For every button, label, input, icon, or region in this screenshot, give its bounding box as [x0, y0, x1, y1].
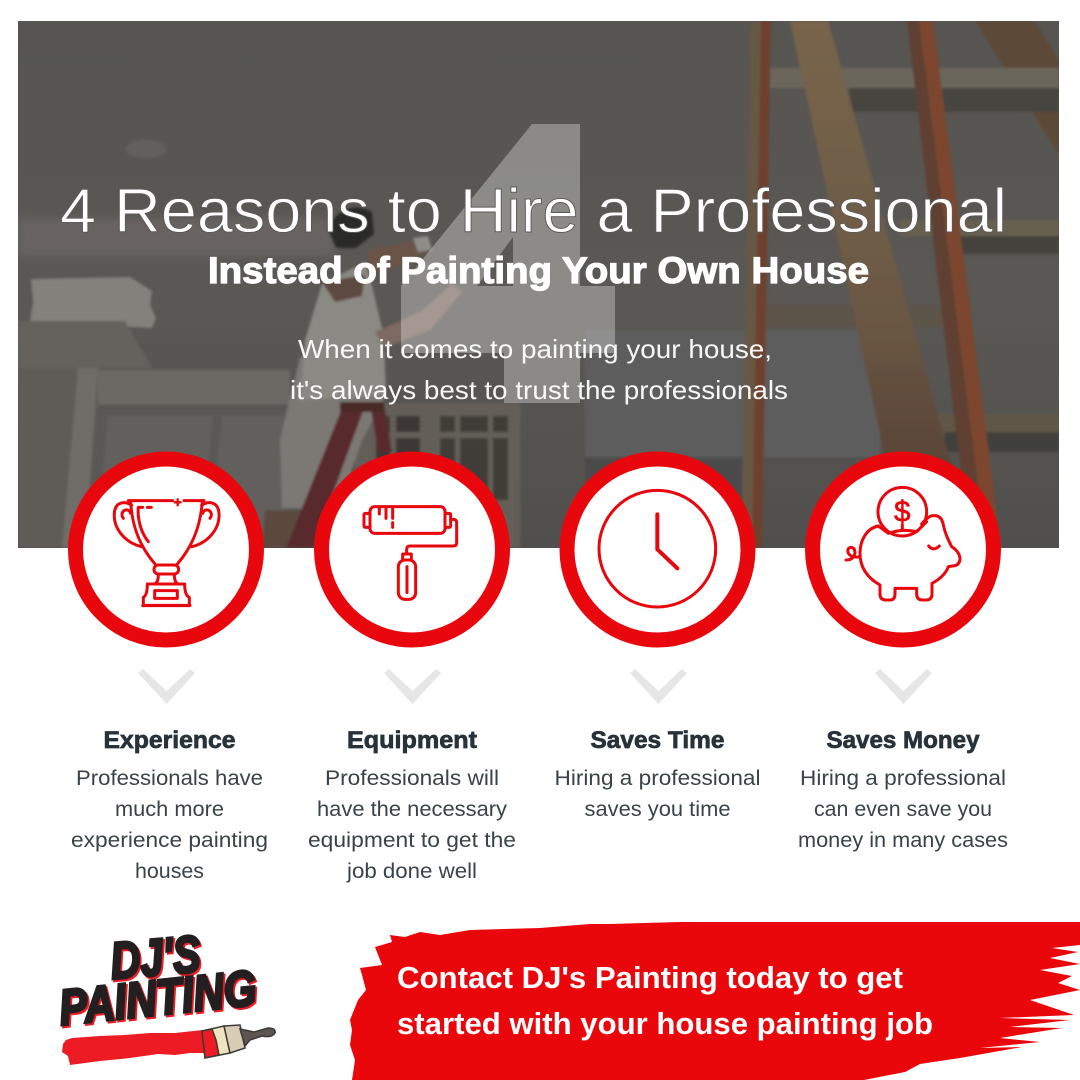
- chevron arrow 4: [875, 669, 932, 704]
- intro text: it's always best to trust the professionals: [290, 375, 788, 405]
- feature: equipment: Equipment: [347, 727, 477, 754]
- circle: experience: [76, 459, 256, 640]
- painter legs and shorts: [280, 352, 386, 510]
- orange ladder rail left: [741, 21, 761, 526]
- icon: piggy bank: [846, 487, 960, 600]
- title: 4 Reasons to Hire a Professional: [60, 177, 1007, 246]
- feature: saves money: can even save you: [814, 798, 992, 821]
- wood ladder far rail: [975, 21, 1059, 155]
- circle: equipment: [322, 459, 502, 640]
- feature: equipment: job done well: [346, 860, 477, 883]
- feature: saves money: [798, 727, 1008, 852]
- feature: saves money: money in many cases: [798, 829, 1008, 852]
- cabinet left column and doors: [18, 368, 98, 548]
- painter shirt: [300, 262, 386, 400]
- large wood ladder rail: [790, 21, 952, 464]
- logo brush: [202, 1025, 275, 1058]
- feature: saves time: Hiring a professional: [554, 767, 760, 790]
- crown molding: [18, 218, 335, 256]
- red step ladder: [286, 403, 366, 548]
- feature: experience: experience painting: [71, 829, 268, 852]
- logo: DJ's Painting: [56, 925, 275, 1065]
- feature: experience: much more: [115, 798, 224, 821]
- cabinet top cornice: [18, 321, 152, 368]
- feature: experience: Professionals have: [76, 767, 263, 790]
- feature: saves time: saves you time: [584, 798, 730, 821]
- feature: equipment: have the necessary: [317, 798, 508, 821]
- logo text PAINTING: PAINTING: [56, 960, 259, 1036]
- ladder rungs: [770, 68, 1059, 88]
- painter lower arm: [375, 284, 462, 348]
- feature: saves time: [554, 727, 760, 821]
- feature: saves money: Saves Money: [826, 727, 980, 754]
- logo text DJ'S: DJ'S: [108, 925, 203, 991]
- recessed ceiling light: [127, 140, 165, 158]
- logo text DJ'S: DJ'S: [110, 927, 205, 993]
- painter neck: [322, 275, 365, 302]
- feature: equipment: Professionals will: [325, 767, 499, 790]
- large translucent number 4: [401, 124, 615, 403]
- stacked boards on cabinet: [30, 277, 156, 328]
- feature: equipment: [308, 727, 516, 883]
- banner: red brush stroke: [350, 922, 1080, 1080]
- logo paint stroke: [62, 1030, 207, 1065]
- lower right wall panel: [585, 330, 880, 457]
- feature: saves money: Hiring a professional: [800, 767, 1006, 790]
- roller handle in hand: [413, 236, 432, 252]
- subtitle: Instead of Painting Your Own House: [208, 250, 869, 291]
- icon: trophy: [114, 499, 219, 606]
- logo text PAINTING: PAINTING: [58, 961, 261, 1038]
- orange ladder rail right: [906, 21, 980, 487]
- chevron arrow 1: [138, 669, 195, 704]
- feature: saves time: Saves Time: [590, 727, 724, 754]
- circle: saves time: [567, 459, 748, 640]
- painter hair: [327, 208, 374, 248]
- panel: hero photo of painter and ladder: [18, 21, 1059, 548]
- call to action text: [397, 960, 933, 1041]
- icon: piggy bank: $: [894, 496, 910, 529]
- feature: experience: Experience: [104, 727, 236, 754]
- call to action text: started with your house painting job: [397, 1006, 933, 1041]
- feature: equipment: equipment to get the: [308, 829, 516, 852]
- intro text: [290, 334, 788, 405]
- feature: experience: houses: [135, 860, 204, 883]
- icon: clock: [599, 490, 716, 607]
- icon: paint roller: [364, 507, 457, 599]
- painter raised arm: [368, 240, 430, 275]
- chevron arrow 3: [630, 669, 687, 704]
- circle: saves money: [812, 459, 994, 640]
- intro text: When it comes to painting your house,: [298, 334, 772, 364]
- glass cabinet doors: [355, 403, 520, 548]
- call to action text: Contact DJ's Painting today to get: [397, 960, 903, 995]
- upper cabinet band: [98, 370, 290, 405]
- feature: experience: [71, 727, 268, 883]
- chevron arrow 2: [384, 669, 441, 704]
